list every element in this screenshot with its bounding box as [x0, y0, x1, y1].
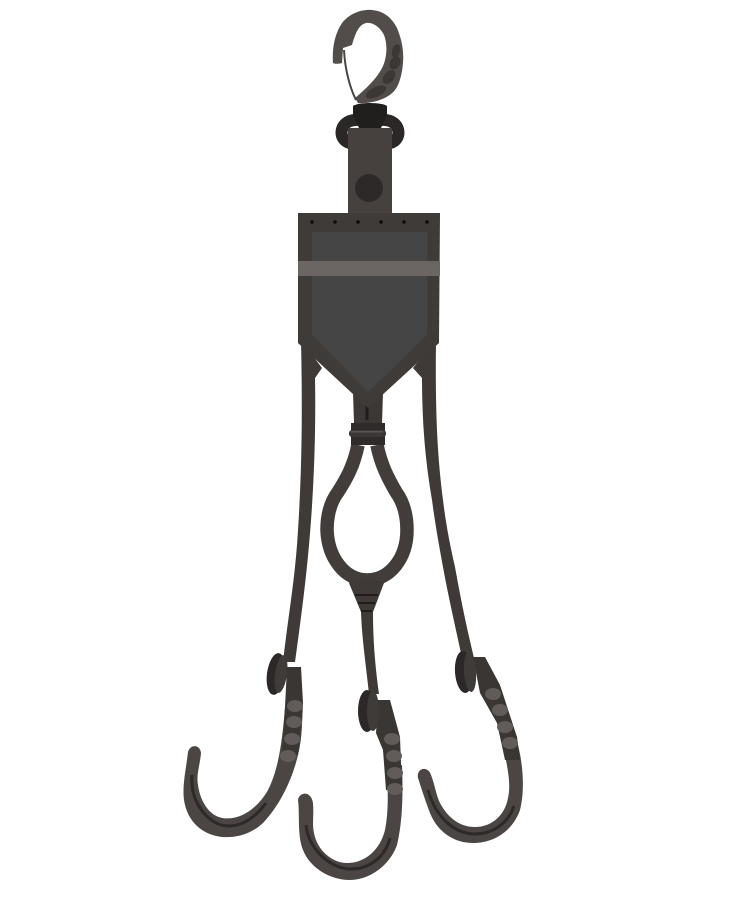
top snap clip: [333, 10, 403, 128]
center neck: [353, 392, 383, 424]
left hook shank: [282, 667, 303, 755]
right hook shank: [473, 657, 520, 760]
swivel barrel: [353, 103, 387, 128]
teardrop loop: [327, 445, 407, 580]
lower stem taper: [349, 579, 384, 694]
right hook swivel ring: [454, 650, 474, 694]
right hook: [418, 650, 523, 843]
left hook: [183, 652, 303, 837]
snap button: [355, 174, 383, 202]
clip grip pads: [364, 43, 403, 101]
plate holes: [310, 220, 429, 224]
strap with snap button: [348, 128, 392, 213]
shield plate: [298, 213, 440, 408]
center hook swivel ring: [358, 690, 376, 732]
collar binding: [349, 423, 386, 445]
center hook knobs: [384, 733, 403, 795]
clip gate wire: [344, 50, 356, 100]
center hook: [298, 690, 403, 880]
plate inner panel: [312, 232, 427, 392]
D-ring: [342, 120, 398, 143]
plate frame: [298, 213, 440, 408]
right hook knobs: [485, 688, 518, 749]
left hook swivel ring: [264, 652, 288, 696]
left hook knobs: [280, 700, 303, 762]
clip body: [333, 10, 403, 103]
reflective band: [298, 261, 440, 276]
center hook shank: [376, 700, 402, 790]
left leg: [283, 340, 322, 662]
right leg: [413, 340, 474, 658]
